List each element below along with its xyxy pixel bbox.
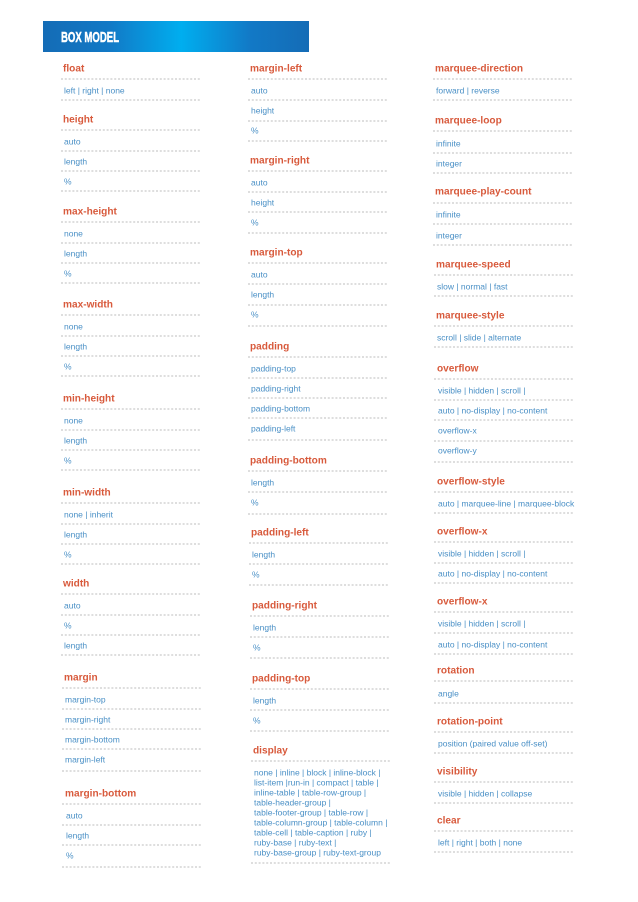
panel: max-width: none — [64, 322, 83, 332]
panel: padding-bottom: length — [251, 478, 274, 488]
panel: rotation-point: position (paired value off-set) — [438, 739, 548, 749]
panel: margin-bottom: % — [66, 851, 74, 861]
panel: display — [251, 745, 390, 863]
panel: margin: margin-left — [65, 755, 106, 765]
panel: rotation-point: rotation-point — [437, 716, 503, 727]
panel: overflow-style: overflow-style — [437, 476, 505, 487]
panel: marquee-play-count — [433, 186, 573, 245]
panel: float: float — [63, 63, 85, 74]
panel: display: display — [253, 745, 288, 756]
panel: max-width — [61, 299, 200, 376]
panel: padding-top: % — [253, 716, 261, 726]
panel: max-width: max-width — [63, 299, 113, 310]
panel: margin-left: margin-left — [250, 63, 303, 74]
panel: margin-bottom — [62, 788, 201, 867]
panel: overflow: overflow — [437, 363, 479, 374]
panel: marquee-loop: infinite — [436, 139, 461, 149]
title banner: BOX MODEL — [61, 29, 119, 46]
panel: float: left | right | none — [64, 86, 125, 96]
panel: overflow-x second: overflow-x — [437, 596, 488, 607]
panel: overflow-x — [434, 526, 574, 583]
panel: padding-bottom: padding-bottom — [250, 455, 327, 466]
panel: max-height: % — [64, 269, 72, 279]
column 3 — [433, 63, 575, 852]
panel: rotation-point — [434, 716, 574, 753]
panel: min-height: % — [64, 456, 72, 466]
panel: clear — [434, 815, 574, 852]
panel: marquee-direction: marquee-direction — [435, 63, 523, 74]
panel: display: inline-table | table-row-group | — [254, 788, 366, 798]
panel: marquee-style: scroll | slide | alternate — [437, 333, 522, 343]
panel: margin-bottom: auto — [66, 811, 83, 821]
panel: overflow-x: visible | hidden | scroll | — [438, 549, 525, 559]
panel: margin-top: auto — [251, 270, 268, 280]
panel: margin-right: height — [251, 198, 275, 208]
panel: rotation: rotation — [437, 665, 475, 676]
panel: max-height — [61, 206, 200, 283]
panel: margin: margin-bottom — [65, 735, 120, 745]
panel: margin-bottom: length — [66, 831, 89, 841]
panel: display: table-header-group | — [254, 798, 331, 808]
panel: clear: left | right | both | none — [438, 838, 522, 848]
panel: margin-top: margin-top — [250, 247, 303, 258]
panel: overflow-style — [434, 476, 575, 513]
panel: margin — [62, 672, 201, 771]
column 2 — [248, 63, 390, 863]
panel: margin-right: margin-right — [250, 155, 310, 166]
panel: overflow — [434, 363, 574, 462]
panel: padding-top: padding-top — [252, 673, 310, 684]
panel: marquee-play-count: integer — [436, 231, 462, 241]
panel: width: % — [64, 621, 72, 631]
panel: display: table-footer-group | table-row | — [254, 808, 368, 818]
panel: overflow: visible | hidden | scroll | — [438, 386, 525, 396]
panel: overflow-x second — [434, 596, 574, 654]
panel: max-height: length — [64, 249, 87, 259]
panel: margin: margin-top — [65, 695, 106, 705]
panel: margin: margin — [64, 672, 98, 683]
panel: margin-left: height — [251, 106, 275, 116]
panel: height: auto — [64, 137, 81, 147]
panel: marquee-style — [434, 310, 574, 347]
panel: overflow: auto | no-display | no-content — [438, 406, 548, 416]
panel: margin-right — [248, 155, 388, 233]
panel: padding: padding-top — [251, 364, 296, 374]
panel: padding-right: padding-right — [252, 600, 318, 611]
panel: marquee-speed — [434, 259, 574, 296]
panel: min-height: none — [64, 416, 83, 426]
panel: max-width: % — [64, 362, 72, 372]
panel: padding-left: padding-left — [251, 527, 309, 538]
panel: min-width — [61, 487, 200, 564]
panel: max-width: length — [64, 342, 87, 352]
panel: display: ruby-base | ruby-text | — [254, 838, 336, 848]
panel: width — [61, 578, 200, 655]
panel: padding-left: % — [252, 570, 260, 580]
panel: overflow-x second: auto | no-display | no-content — [438, 640, 548, 650]
panel: display: table-cell | table-caption | ruby | — [254, 828, 372, 838]
panel: padding: padding-bottom — [251, 404, 310, 414]
panel: marquee-direction: forward | reverse — [436, 86, 500, 96]
panel: display: list-item |run-in | compact | table | — [254, 778, 379, 788]
panel: marquee-loop: integer — [436, 159, 462, 169]
panel: marquee-direction — [433, 63, 573, 100]
panel: padding — [248, 341, 388, 440]
panel: rotation — [434, 665, 574, 703]
panel: padding: padding-left — [251, 424, 296, 434]
panel: marquee-speed: slow | normal | fast — [437, 282, 508, 292]
panel: margin-top: length — [251, 290, 274, 300]
panel: padding-right: length — [253, 623, 276, 633]
panel: display: none | inline | block | inline-block | — [254, 768, 380, 778]
column 1 — [61, 63, 201, 867]
panel: min-width: length — [64, 530, 87, 540]
panel: float — [61, 63, 200, 100]
panel: margin-top — [248, 247, 388, 326]
panel: overflow: overflow-x — [438, 426, 477, 436]
panel: margin-top: % — [251, 310, 259, 320]
panel: margin-right: % — [251, 218, 259, 228]
title banner — [43, 21, 309, 52]
panel: height: length — [64, 157, 87, 167]
panel: marquee-loop: marquee-loop — [435, 115, 502, 126]
panel: visibility: visibility — [437, 766, 478, 777]
panel: padding-left: length — [252, 550, 275, 560]
panel: display: ruby-base-group | ruby-text-group — [254, 848, 381, 858]
panel: height — [61, 114, 200, 191]
panel: padding-right — [250, 600, 390, 658]
panel: overflow-style: auto | marquee-line | marquee-block — [438, 499, 575, 509]
panel: overflow-x: overflow-x — [437, 526, 488, 537]
panel: overflow: overflow-y — [438, 446, 477, 456]
panel: visibility: visible | hidden | collapse — [438, 789, 532, 799]
panel: padding: padding — [250, 341, 289, 352]
panel: padding-top: length — [253, 696, 276, 706]
panel: rotation: angle — [438, 689, 459, 699]
panel: margin-left — [248, 63, 388, 141]
panel: marquee-play-count: marquee-play-count — [435, 186, 532, 197]
panel: margin: margin-right — [65, 715, 111, 725]
panel: min-width: % — [64, 550, 72, 560]
panel: min-width: min-width — [63, 487, 111, 498]
panel: min-height: min-height — [63, 393, 115, 404]
panel: marquee-style: marquee-style — [436, 310, 505, 321]
panel: display: table-column-group | table-column | — [254, 818, 387, 828]
panel: margin-left: auto — [251, 86, 268, 96]
panel: max-height: none — [64, 229, 83, 239]
panel: height: height — [63, 114, 94, 125]
panel: margin-right: auto — [251, 178, 268, 188]
panel: padding-bottom — [248, 455, 388, 514]
panel: clear: clear — [437, 815, 461, 826]
panel: visibility — [434, 766, 574, 803]
panel: padding-left — [249, 527, 389, 585]
panel: padding-top — [250, 673, 390, 731]
panel: overflow-x second: visible | hidden | scroll | — [438, 619, 525, 629]
panel: margin-bottom: margin-bottom — [65, 788, 136, 799]
panel: padding-right: % — [253, 643, 261, 653]
panel: min-height — [61, 393, 200, 470]
panel: width: length — [64, 641, 87, 651]
panel: width: width — [62, 578, 89, 589]
panel: min-width: none | inherit — [64, 510, 114, 520]
panel: padding-bottom: % — [251, 498, 259, 508]
panel: marquee-play-count: infinite — [436, 210, 461, 220]
panel: max-height: max-height — [63, 206, 117, 217]
panel: height: % — [64, 177, 72, 187]
panel: marquee-loop — [433, 115, 573, 173]
panel: margin-left: % — [251, 126, 259, 136]
panel: min-height: length — [64, 436, 87, 446]
panel: padding: padding-right — [251, 384, 301, 394]
panel: marquee-speed: marquee-speed — [436, 259, 511, 270]
panel: width: auto — [64, 601, 81, 611]
panel: overflow-x: auto | no-display | no-content — [438, 569, 548, 579]
